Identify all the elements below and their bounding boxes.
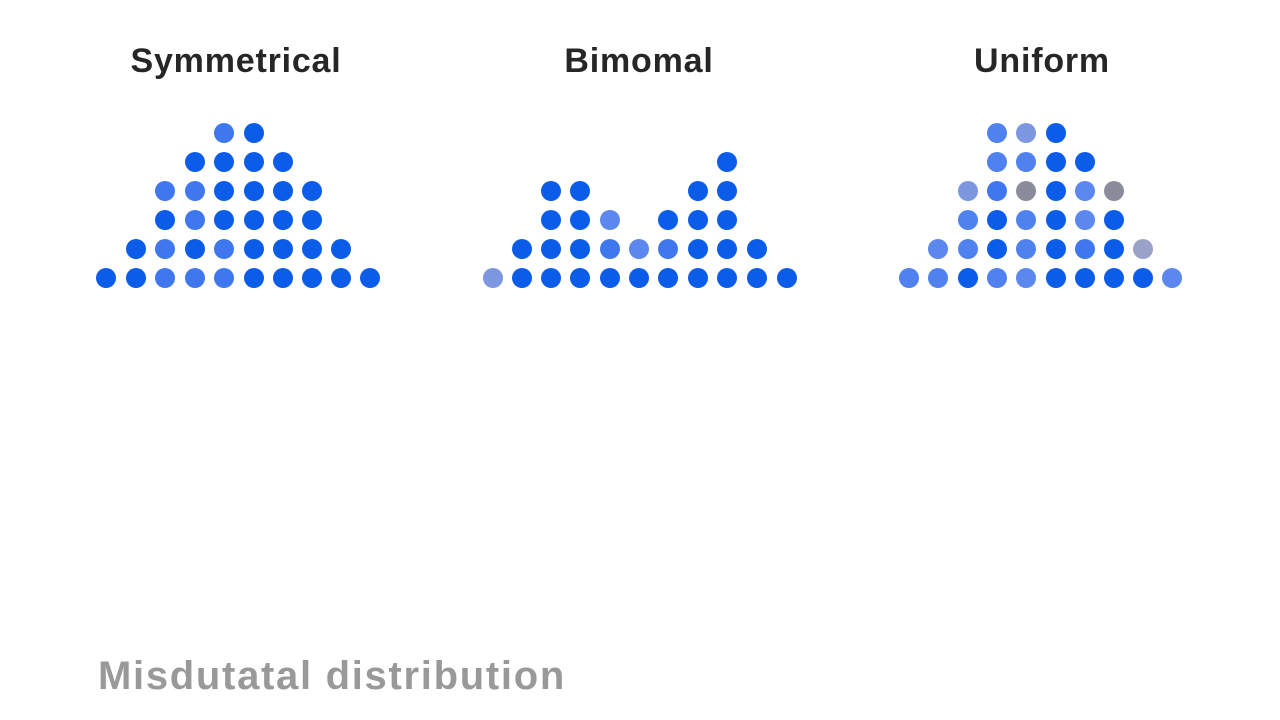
dot chart: bimodal bbox=[483, 152, 797, 288]
dot chart: symmetrical bbox=[96, 123, 380, 288]
title: Uniform: Uniform bbox=[974, 42, 1110, 80]
title: Bimomal: Bimomal bbox=[564, 42, 714, 80]
title: Symmetrical: Symmetrical bbox=[130, 42, 342, 80]
caption: bottom text: Misdutatal distribution bbox=[98, 654, 566, 698]
dot chart: uniform bbox=[899, 123, 1182, 288]
